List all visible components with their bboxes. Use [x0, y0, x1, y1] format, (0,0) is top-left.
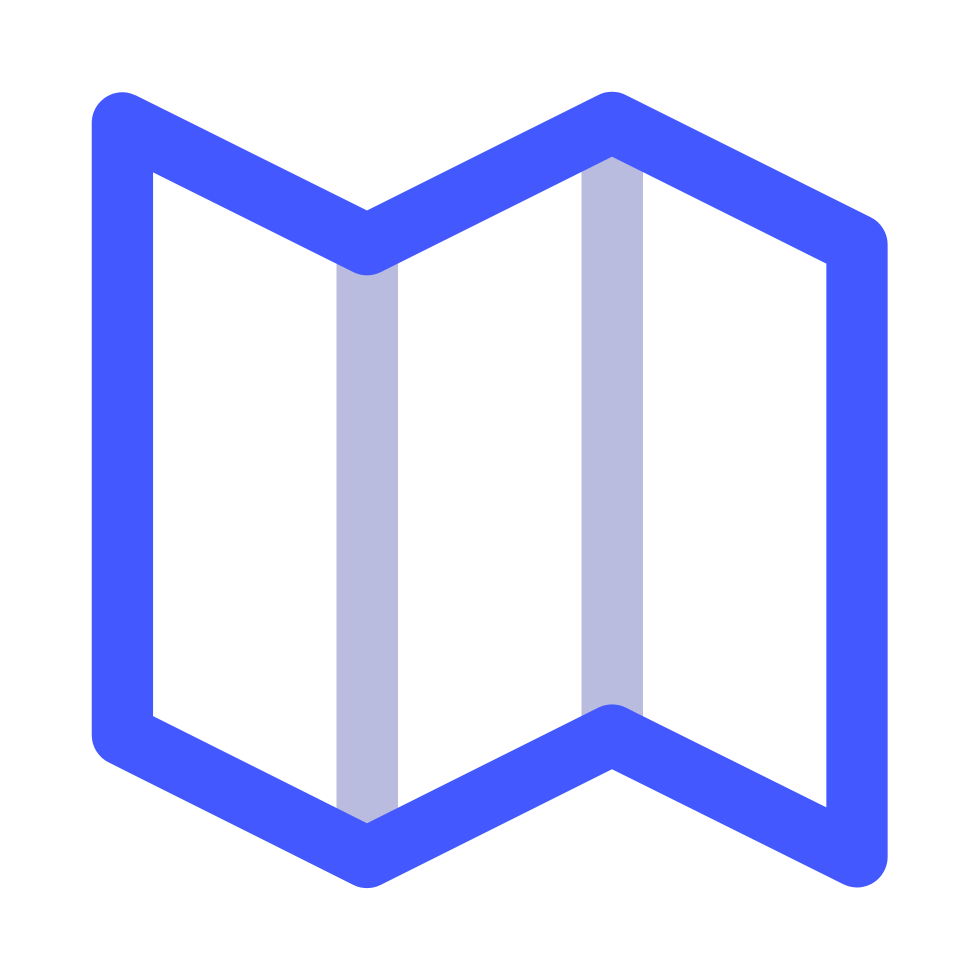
- map outline: [122, 122, 857, 857]
- map fold lines: [336, 135, 643, 835]
